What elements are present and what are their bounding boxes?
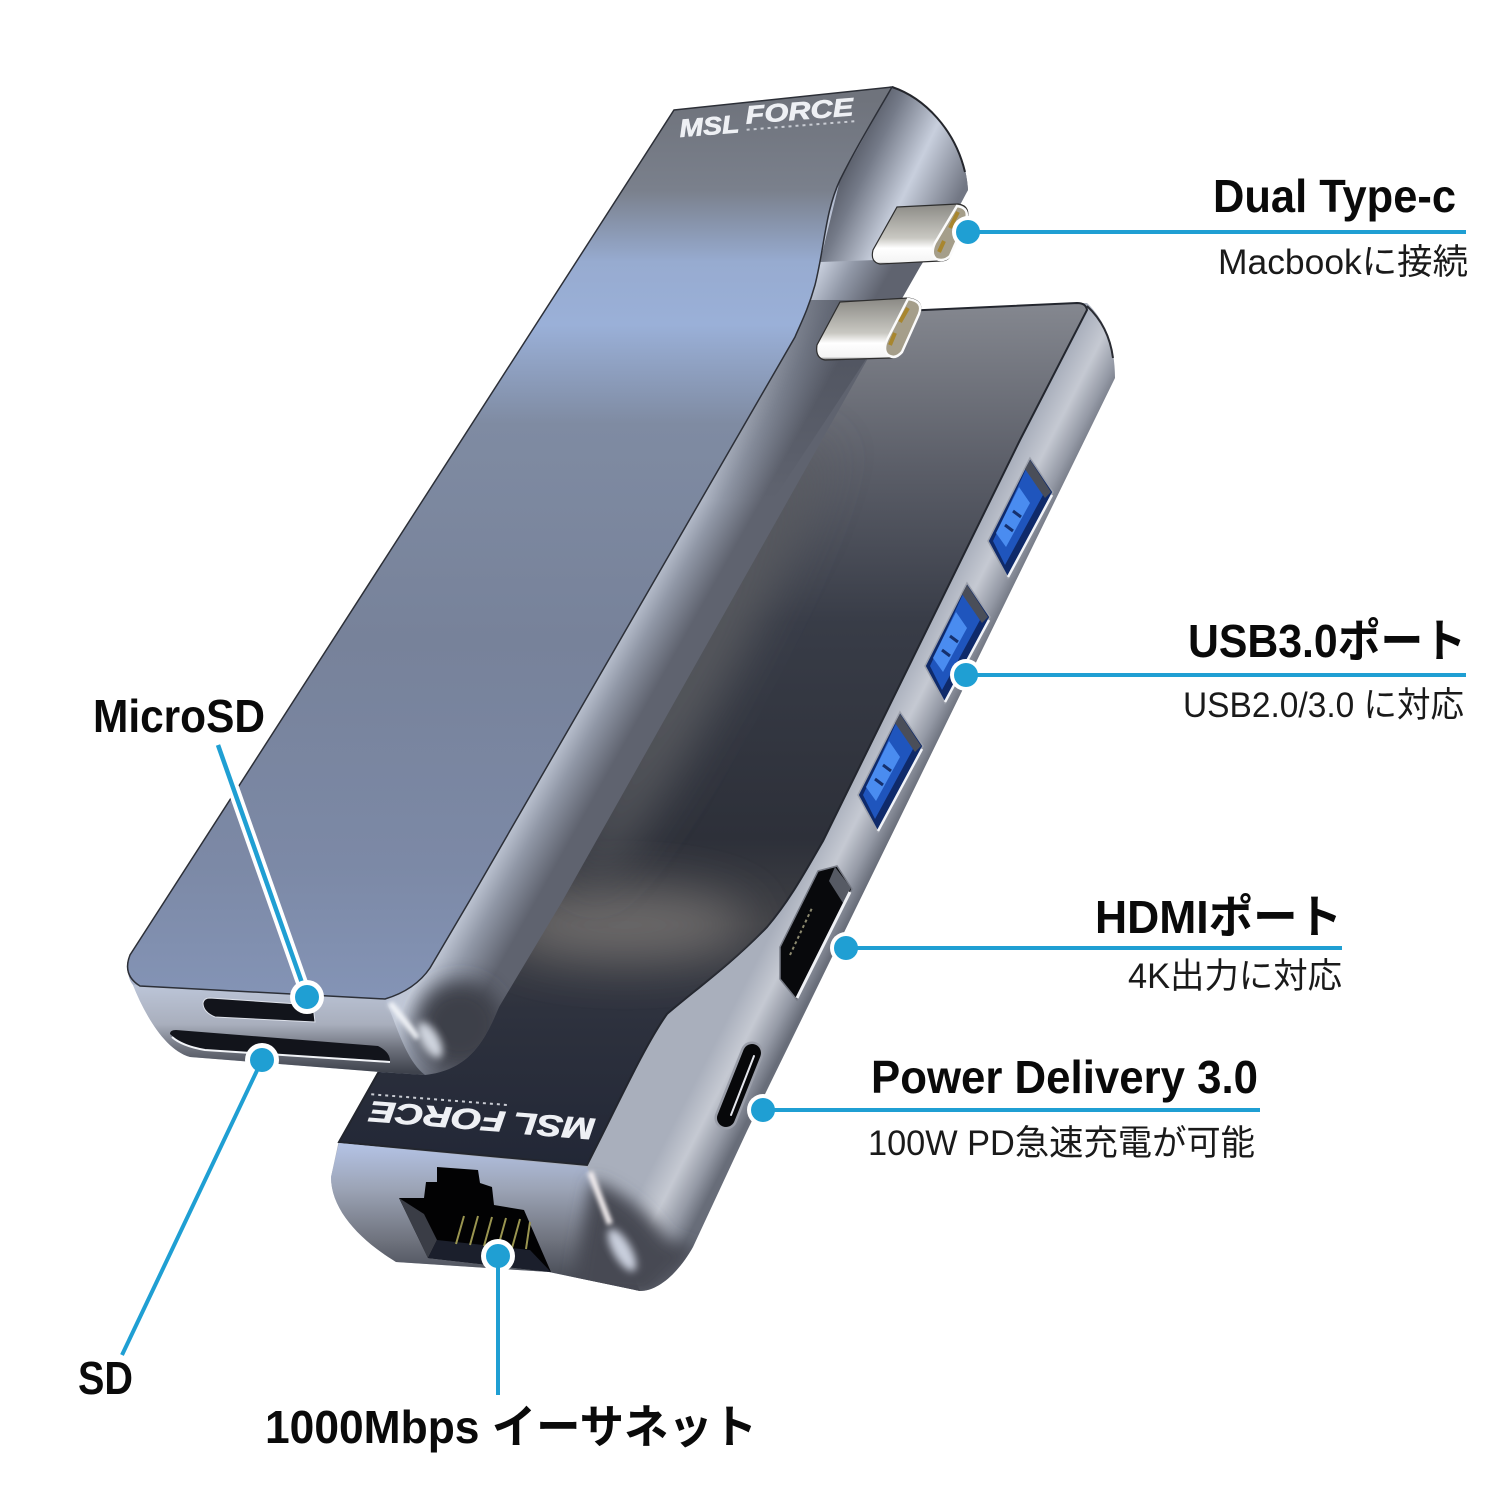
callout: HDMI: 4K出力に対応 [1128, 957, 1342, 996]
logo: MSL FORCE on upper unit: MSL [678, 110, 740, 143]
logo: MSL FORCE on lower unit [366, 1094, 597, 1145]
icon: USB 3.0 port 1 [988, 458, 1053, 578]
icon: USB 3.0 port 2 [925, 583, 990, 703]
callout: Power Delivery: 100W PD急速充電が可能 [868, 1124, 1255, 1163]
callout: Power Delivery [747, 1051, 1260, 1163]
icon: USB-C PD port [726, 1053, 754, 1118]
callout: MicroSD: MicroSD [93, 690, 265, 742]
upper unit end seam blend [812, 254, 890, 270]
lower unit top-corner edge [1087, 306, 1113, 358]
upper unit curved end [820, 87, 968, 262]
lower unit face reflections [524, 526, 790, 985]
logo: MSL FORCE on upper unit [678, 93, 857, 143]
logo: MSL FORCE on upper unit: FORCE [744, 93, 856, 130]
callout: Dual Type-c [952, 170, 1468, 282]
callout: SD [78, 1043, 279, 1404]
microSD slot [203, 998, 315, 1022]
upper unit top face [128, 87, 892, 999]
callout: SD: SD [78, 1352, 133, 1404]
device: lower hub unit [331, 303, 1115, 1300]
logo: MSL FORCE on lower unit: FORCE [367, 1094, 507, 1137]
logo: MSL FORCE on lower unit: MSL [512, 1106, 597, 1145]
callout: Ethernet [265, 1239, 757, 1453]
lower unit RJ45 front face [331, 1143, 640, 1291]
icon: HDMI port [780, 866, 852, 1000]
upper unit strip shade near connectors [680, 300, 905, 520]
callout: HDMI: HDMIポート [1095, 891, 1342, 943]
lower unit side body [331, 303, 1115, 1291]
callout: MicroSD [93, 690, 324, 1014]
USB-C connector: lower [817, 298, 921, 360]
SD card slot [170, 1030, 390, 1061]
callout: USB3.0: USB3.0ポート [1188, 615, 1466, 667]
USB-C connector: upper [872, 204, 968, 264]
callout: Dual Type-c: Dual Type-c [1213, 170, 1456, 222]
callout: USB3.0: USB2.0/3.0 に対応 [1183, 686, 1464, 725]
callout: HDMI [830, 891, 1342, 996]
icon: USB 3.0 port 3 [858, 712, 923, 832]
device: upper hub unit [128, 87, 968, 1075]
SD card slot rim [172, 1037, 390, 1062]
upper unit body side [128, 87, 968, 1075]
upper corner highlights [390, 1003, 448, 1062]
callout: Ethernet: 1000Mbps イーサネット [265, 1401, 757, 1453]
callout: Power Delivery: Power Delivery 3.0 [871, 1051, 1258, 1103]
callout: USB3.0 [950, 615, 1466, 725]
callout: Dual Type-c: Macbookに接続 [1218, 243, 1468, 282]
lower unit dark top face [339, 303, 1087, 1165]
upper unit corner shading [416, 981, 504, 1069]
upper unit front face [133, 985, 425, 1075]
upper unit curved end edge [892, 87, 965, 172]
lower unit end corner shading [572, 1172, 700, 1300]
icon: RJ45 ethernet port [399, 1167, 551, 1272]
